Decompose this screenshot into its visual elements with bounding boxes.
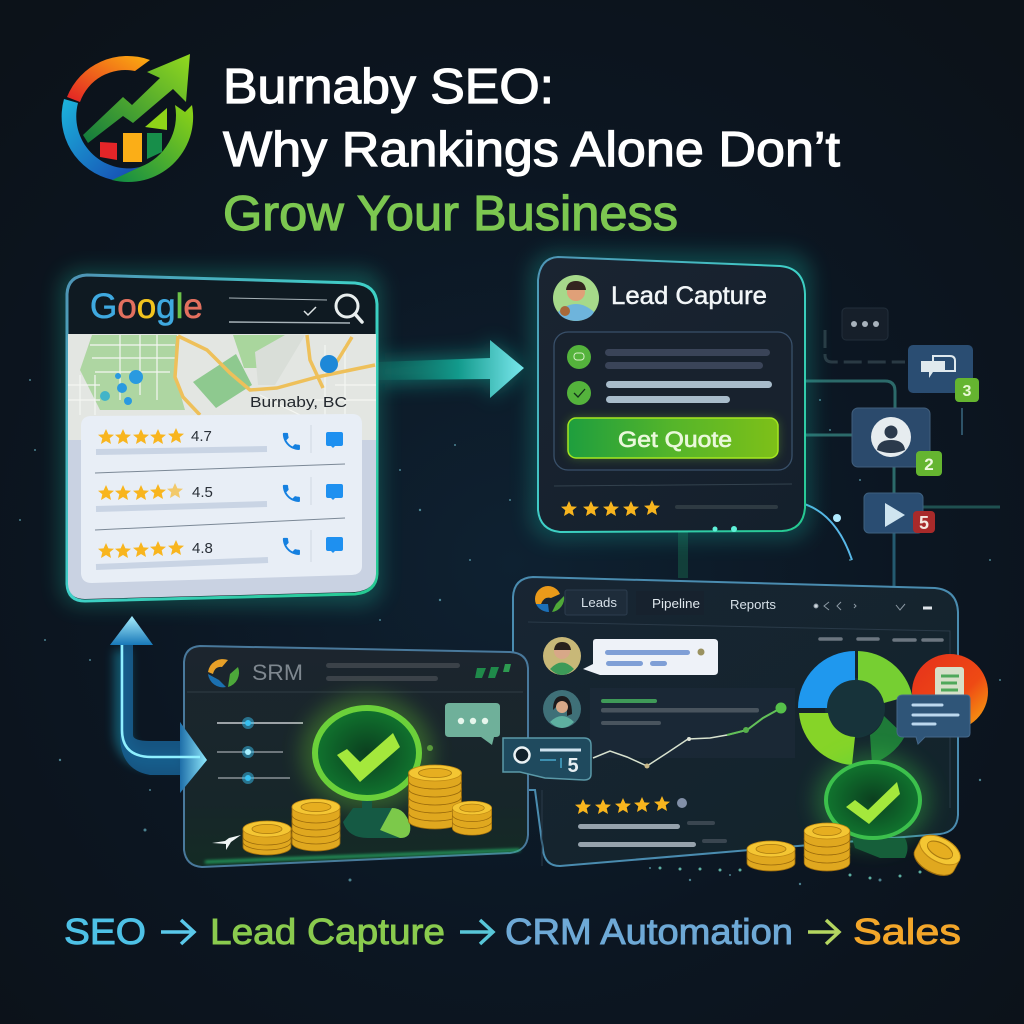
speech tile [897, 695, 970, 744]
avatar [543, 690, 581, 728]
lead row one [543, 637, 718, 675]
SRM logo [208, 659, 239, 687]
search header [90, 287, 362, 326]
logo rising arrow [83, 54, 190, 143]
button: Get Quote [568, 418, 778, 458]
form box [554, 332, 792, 470]
tab: Leads [565, 590, 627, 615]
background particles [19, 379, 1001, 885]
icon: map pins [100, 355, 338, 405]
coins right tall stack [409, 765, 461, 829]
donut chart [798, 651, 912, 765]
sparkle [212, 835, 241, 850]
tab: Leads: Leads [581, 595, 618, 610]
badge overlay 5: 5 [567, 755, 579, 777]
toolbar icons [814, 602, 932, 610]
coin tilted [909, 829, 965, 882]
panel: SRM [184, 646, 528, 867]
title line one: Burnaby SEO: [223, 60, 554, 114]
glow dots [712, 526, 737, 532]
panel: Lead Capture [530, 252, 812, 540]
coins right small stack [452, 801, 492, 835]
connector lines [683, 330, 1000, 590]
arrow: Google to Lead Capture [378, 340, 524, 398]
stars [575, 796, 670, 814]
timeline sliders [217, 717, 303, 784]
footer: Lead Capture: Lead Capture [210, 911, 445, 952]
badge 2: 2 [924, 455, 934, 474]
bottom rating block [575, 796, 727, 847]
map [68, 334, 376, 599]
logo [62, 54, 193, 182]
coins: dashboard [747, 823, 965, 882]
large check badge [815, 752, 931, 858]
star rating [561, 500, 660, 516]
header bars [326, 663, 460, 681]
avatar [543, 637, 581, 675]
coins middle stack [292, 799, 340, 851]
logo green arc [112, 105, 193, 182]
panel: Google local search [60, 270, 382, 606]
flow footer [64, 911, 961, 952]
map label: Burnaby, BC [250, 394, 347, 411]
coins left stack [243, 821, 291, 855]
speech bubble [583, 639, 718, 675]
panel: CRM dashboard [513, 577, 988, 866]
footer: Sales: Sales [853, 911, 961, 952]
green signal marks [475, 664, 511, 678]
glowing baseline dots [658, 866, 922, 880]
lead row two [543, 688, 795, 758]
SRM heading: SRM [252, 660, 303, 685]
icon: avatar [553, 275, 599, 321]
top legend dashes [820, 639, 942, 640]
coins left pile [747, 841, 795, 871]
button: Get Quote: Get Quote [618, 427, 732, 452]
tab: Pipeline [636, 591, 704, 615]
inner frame [528, 622, 950, 866]
title [223, 60, 840, 241]
search field [229, 298, 350, 323]
icon: person tile with badge 2 [852, 408, 942, 476]
heading: Lead Capture: Lead Capture [611, 282, 767, 310]
CRM logo [535, 586, 564, 612]
icon: play tile with badge 5 [864, 493, 935, 533]
form row icons [567, 345, 591, 405]
Google wordmark: Google [90, 287, 203, 326]
arrow: Lead Capture to CRM [460, 920, 493, 944]
listing row 4.7: 4.7 [191, 428, 212, 445]
badge overlay 5 [503, 738, 591, 780]
icon: magnifier [336, 295, 362, 322]
listing row 4.5 [96, 477, 343, 509]
logo blue arc [62, 99, 140, 180]
logo bars [100, 108, 167, 162]
listing row 4.8 [96, 530, 343, 567]
arrow: CRM to Sales [808, 920, 839, 944]
arrow: SEO to Lead Capture [161, 920, 194, 944]
badge 3: 3 [963, 383, 972, 400]
title line two: Why Rankings Alone Don’t [223, 123, 840, 177]
chat bubble [445, 703, 500, 745]
logo red orange arc [67, 56, 150, 102]
check badge [301, 695, 433, 838]
tab: Pipeline: Pipeline [652, 596, 700, 611]
badge 5: 5 [919, 513, 929, 533]
tab: Reports: Reports [730, 597, 776, 612]
line chart [593, 702, 786, 768]
red circle icon [912, 654, 988, 730]
footer: CRM Automation: CRM Automation [505, 911, 793, 952]
arrow: SRM back to Google [110, 616, 207, 793]
listing row 4.7 [96, 425, 343, 453]
coins middle stack [804, 823, 850, 871]
title line three: Grow Your Business [223, 187, 678, 241]
coin stacks [243, 765, 492, 855]
node dot [833, 514, 841, 522]
listing row 4.5: 4.5 [192, 484, 213, 501]
listing row 4.8: 4.8 [192, 540, 213, 557]
icon: message dots tile [842, 308, 888, 340]
footer: SEO: SEO [64, 911, 146, 952]
icon: chat tile with badge 3 [908, 345, 979, 402]
form row bars [605, 349, 772, 403]
listing card [81, 414, 362, 583]
